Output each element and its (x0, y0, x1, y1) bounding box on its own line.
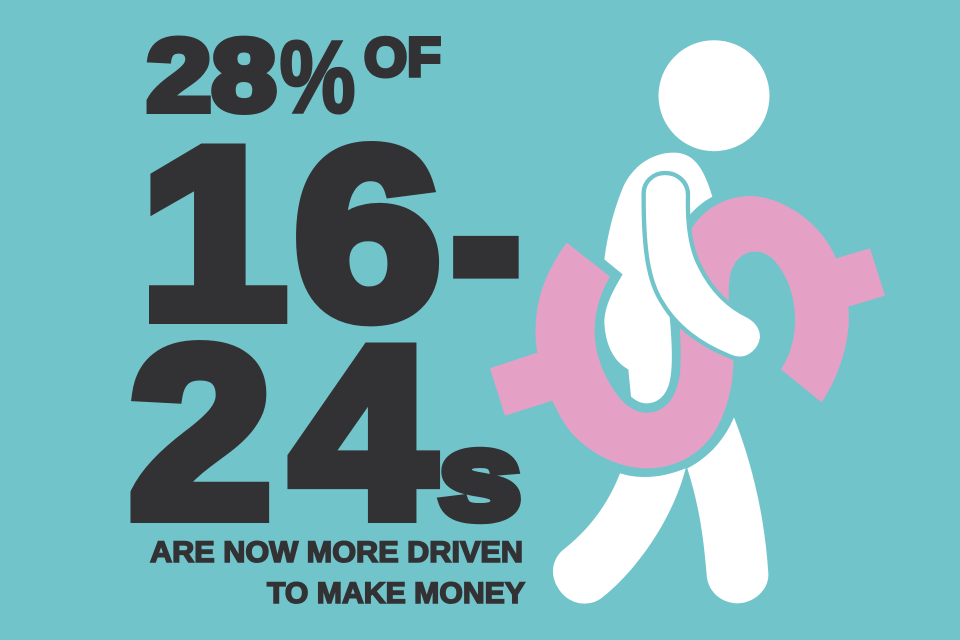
heading: 28% of (146, 18, 441, 134)
big number: 24s (129, 298, 521, 568)
heading: 28% of: OF (364, 26, 441, 88)
big number: 16- (140, 99, 521, 372)
big number: 16-: 1 (140, 99, 287, 369)
heading: 28% of: 28 (146, 18, 276, 132)
figure torso (604, 153, 712, 403)
figure head (658, 40, 770, 151)
big number: 24s: 4 (291, 298, 434, 568)
figure legs (553, 417, 768, 604)
pound sign: lower-left stroke (490, 243, 733, 468)
caption: are now more driven to make money: TO MAKE MONEY (267, 577, 525, 610)
big number: 16-: 6 (294, 99, 441, 369)
figure arm (644, 173, 762, 359)
pound sign: upper-right stroke (691, 196, 885, 402)
caption: are now more driven to make money: ARE NOW MORE DRIVEN (150, 536, 523, 569)
big number: 24s: s (439, 408, 521, 545)
big number: 16-: - (451, 102, 521, 372)
heading: 28% of: % (280, 20, 356, 134)
pound sign and figure torso (490, 153, 885, 468)
icon: walking figure carrying pound sign (490, 40, 885, 604)
big number: 24s: 2 (129, 298, 272, 568)
caption: are now more driven to make money (150, 536, 525, 610)
